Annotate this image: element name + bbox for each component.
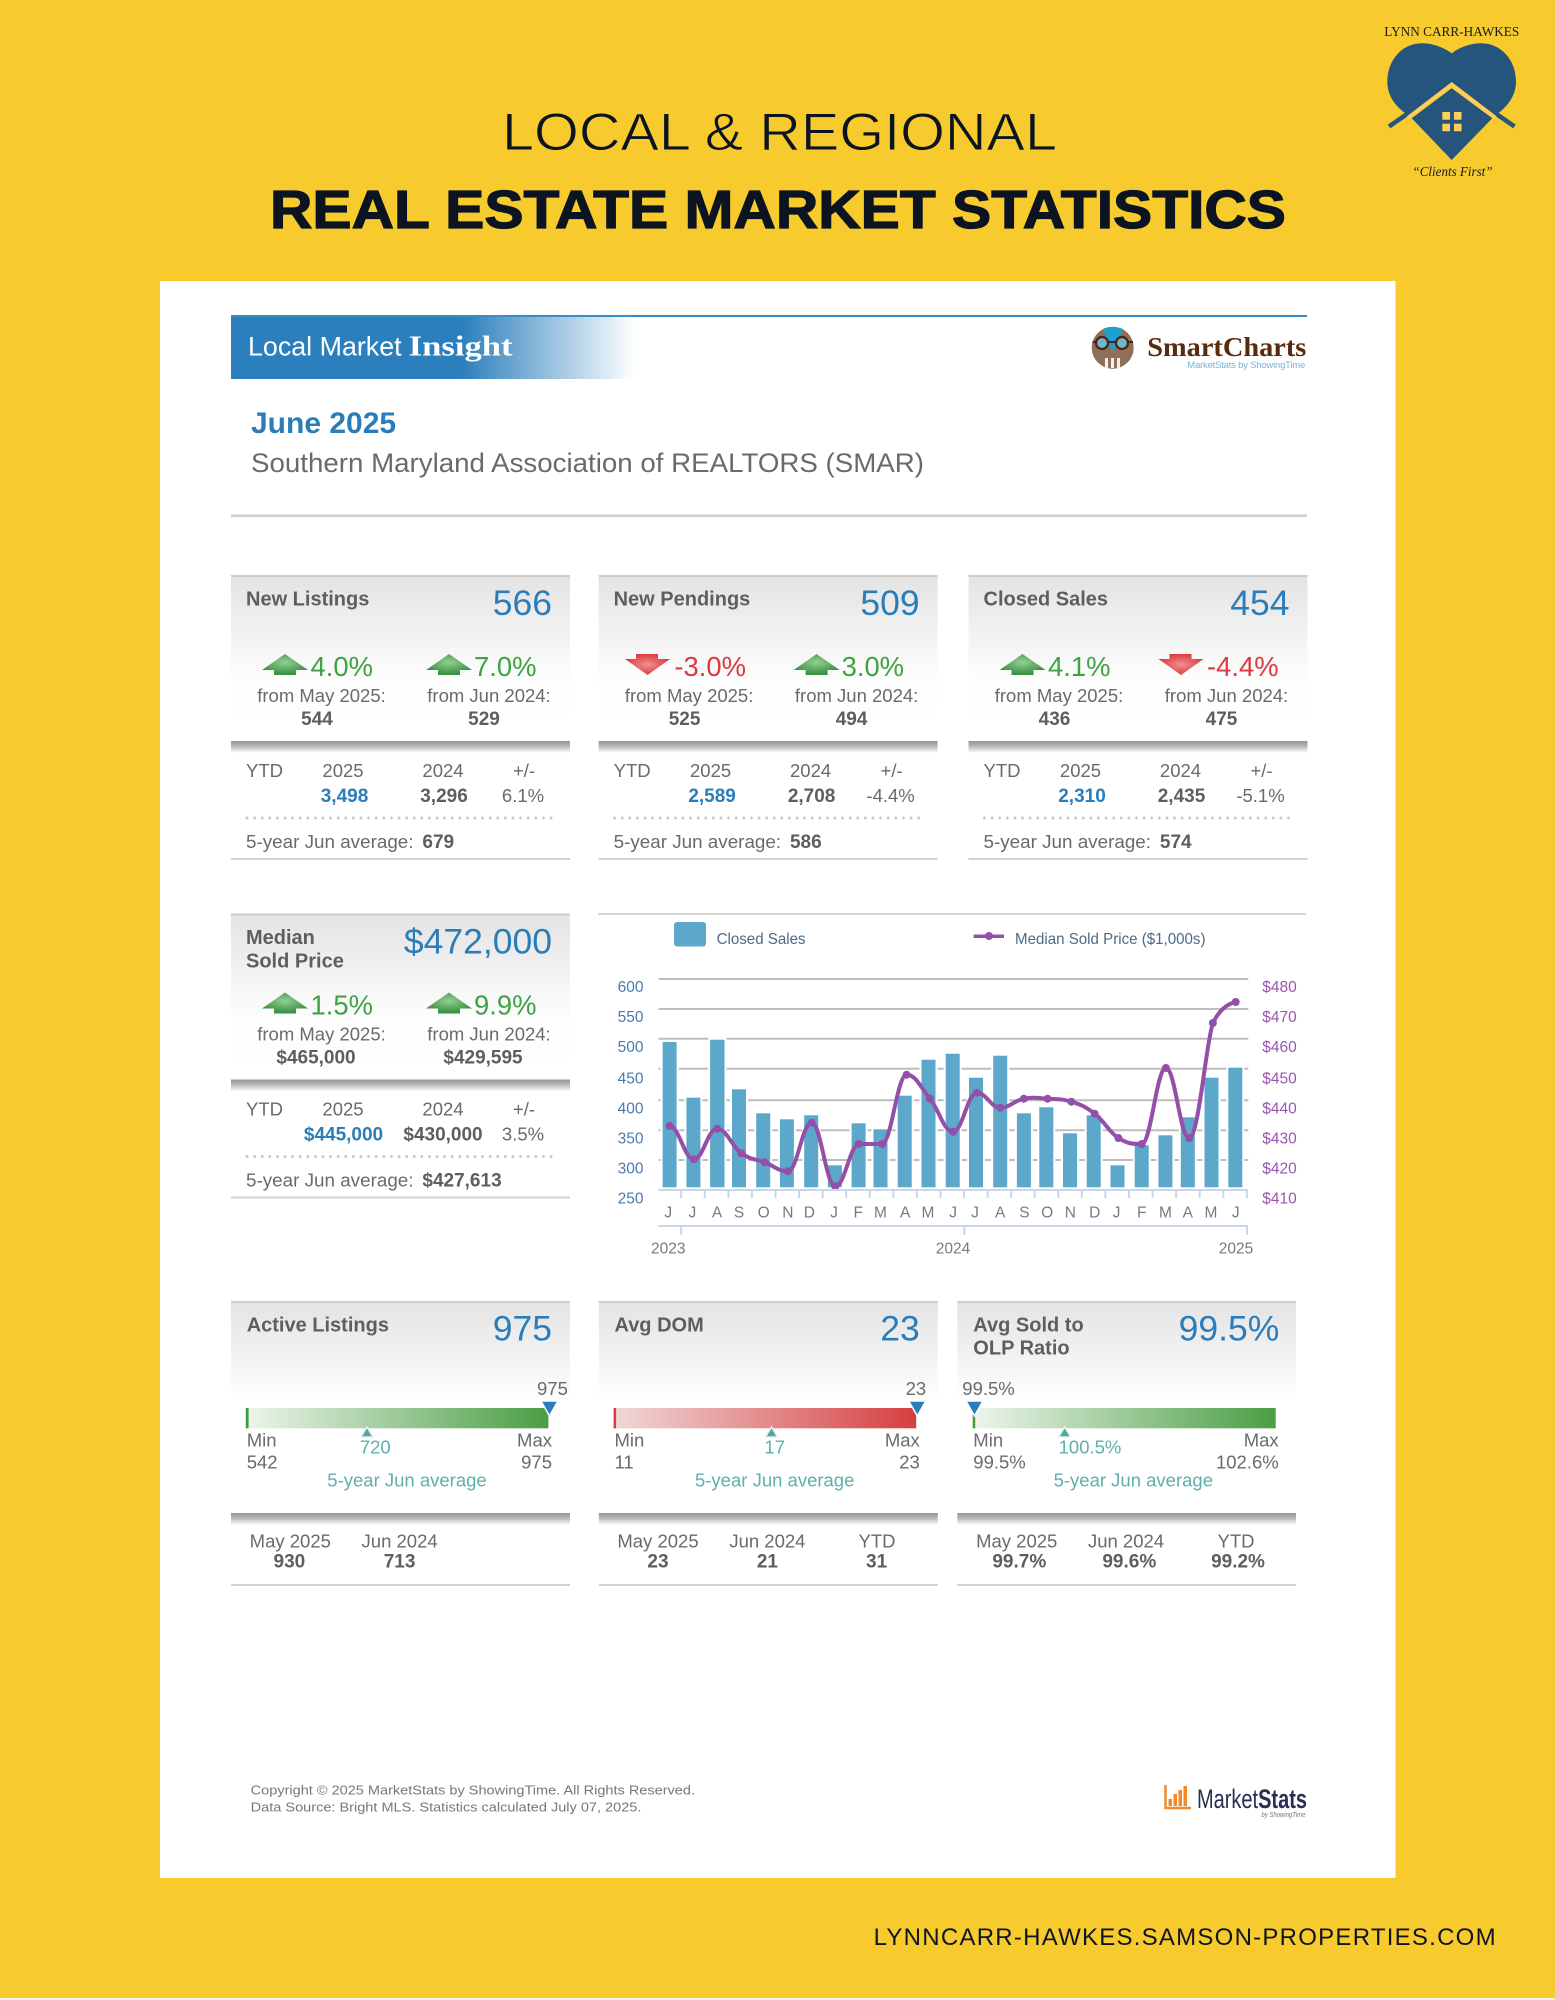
panel: Avg Sold to OLP Ratio: 102.6% bbox=[1216, 1451, 1279, 1472]
panel: New Listings: 3,296 bbox=[420, 786, 468, 807]
panel: Closed Sales: 574 bbox=[1160, 832, 1192, 853]
panel: New Pendings: 494 bbox=[836, 709, 868, 730]
x axis: months and years: J bbox=[1232, 1204, 1240, 1221]
panel: Avg Sold to OLP Ratio: 5-year Jun average bbox=[1054, 1470, 1213, 1491]
panel: New Listings: from May 2025: bbox=[257, 685, 386, 706]
right axis labels: median price: $410 bbox=[1262, 1191, 1297, 1208]
panel: Avg DOM: 5-year Jun average bbox=[695, 1470, 854, 1491]
gauge bar bbox=[966, 1401, 1276, 1437]
x axis: months and years: A bbox=[712, 1204, 723, 1221]
copyright footnote: Copyright © 2025 MarketStats by ShowingTime. All Rights Reserved. bbox=[251, 1782, 695, 1797]
panel: Active Listings: Active Listings bbox=[247, 1315, 389, 1337]
panel: Closed Sales: 2024 bbox=[1160, 760, 1201, 781]
panel: New Pendings: YTD bbox=[614, 760, 651, 781]
left axis labels: closed sales: 350 bbox=[618, 1131, 644, 1148]
panel: Avg DOM: 11 bbox=[614, 1451, 634, 1472]
panel: New Listings: 5-year Jun average: bbox=[246, 831, 414, 852]
panel: Median Sold Price: 1.5% bbox=[310, 990, 373, 1020]
panel: New Pendings: from May 2025: bbox=[625, 685, 753, 706]
panel: New Pendings: 5-year Jun average: bbox=[614, 831, 781, 852]
panel: New Listings: 2025 bbox=[322, 760, 364, 781]
right axis labels: median price: $430 bbox=[1262, 1131, 1297, 1148]
logo: MarketStats bbox=[1166, 1784, 1307, 1819]
title: LOCAL & REGIONAL bbox=[502, 103, 1057, 162]
panel: Closed Sales: +/- bbox=[1250, 760, 1273, 781]
report date and association heading: June 2025 bbox=[251, 407, 396, 440]
x axis: months and years: S bbox=[1019, 1204, 1030, 1221]
panel: Avg Sold to OLP Ratio: 99.7% bbox=[992, 1552, 1046, 1573]
panel: New Pendings: +/- bbox=[881, 760, 903, 781]
panel: New Pendings: New Pendings bbox=[614, 588, 750, 610]
report date and association heading: Southern Maryland Association of REALTORS (SMAR) bbox=[251, 448, 924, 478]
panel: Median Sold Price: 2025 bbox=[322, 1098, 364, 1120]
title: REAL ESTATE MARKET STATISTICS bbox=[270, 180, 1286, 240]
panel: Active Listings: 720 bbox=[360, 1436, 391, 1457]
x axis: months and years: 2024 bbox=[936, 1240, 971, 1257]
line: median sold price bbox=[666, 998, 1240, 1190]
panel: Avg Sold to OLP Ratio: Jun 2024 bbox=[1088, 1531, 1164, 1552]
right axis labels: median price: $440 bbox=[1262, 1101, 1297, 1118]
panel: New Listings: New Listings bbox=[246, 588, 369, 610]
panel: New Listings: 3,498 bbox=[321, 786, 368, 807]
panel: Active Listings: 975 bbox=[521, 1451, 552, 1472]
logo: MarketStats: MarketStats bbox=[1197, 1784, 1307, 1814]
logo: Lynn Carr-Hawkes heart and house bbox=[1384, 24, 1519, 180]
panel: Avg Sold to OLP Ratio: Avg Sold to bbox=[973, 1315, 1084, 1337]
panel: Median Sold Price: from May 2025: bbox=[257, 1024, 386, 1044]
panel: Closed Sales bbox=[968, 575, 1308, 860]
x axis: months and years: M bbox=[1205, 1204, 1217, 1221]
panel: Avg DOM: 23 bbox=[880, 1309, 920, 1349]
panel: Active Listings: 542 bbox=[247, 1451, 278, 1472]
panel: Median Sold Price bbox=[231, 914, 570, 1198]
panel: white report sheet bbox=[160, 281, 1396, 1878]
panel: Avg Sold to OLP Ratio: OLP Ratio bbox=[973, 1337, 1070, 1359]
header band: Local Market Insight: Local Market bbox=[248, 332, 402, 362]
panel: New Listings: +/- bbox=[513, 760, 535, 781]
x axis: months and years: M bbox=[874, 1204, 887, 1221]
right axis labels: median price: $480 bbox=[1262, 979, 1297, 996]
panel: Avg DOM: Max bbox=[885, 1430, 921, 1451]
x axis: months and years: J bbox=[830, 1204, 838, 1221]
logo: SmartCharts owl: MarketStats by ShowingTime bbox=[1187, 360, 1305, 371]
panel: Median Sold Price: $429,595 bbox=[443, 1048, 523, 1068]
panel: Avg Sold to OLP Ratio: 99.6% bbox=[1102, 1552, 1156, 1573]
header band: Local Market Insight bbox=[231, 315, 1307, 379]
panel: New Listings: 7.0% bbox=[474, 651, 536, 682]
x axis: months and years: A bbox=[1183, 1204, 1194, 1221]
panel: New Listings: 679 bbox=[422, 832, 454, 853]
chart legend: Closed Sales bbox=[717, 931, 806, 948]
panel: Active Listings: 930 bbox=[274, 1552, 305, 1573]
panel: Active Listings bbox=[231, 1301, 570, 1586]
panel: Avg Sold to OLP Ratio: 100.5% bbox=[1059, 1436, 1121, 1457]
panel: New Pendings: 525 bbox=[669, 709, 701, 730]
panel: Median Sold Price: +/- bbox=[513, 1098, 535, 1120]
left axis labels: closed sales: 600 bbox=[618, 979, 644, 996]
panel: Active Listings: May 2025 bbox=[250, 1531, 331, 1552]
chart legend bbox=[674, 922, 1206, 948]
panel: Active Listings: Max bbox=[517, 1430, 553, 1451]
x axis: months and years: F bbox=[1137, 1204, 1146, 1221]
panel: Closed Sales: YTD bbox=[984, 760, 1020, 781]
panel: Avg DOM: Min bbox=[614, 1430, 644, 1451]
x axis: months and years: S bbox=[734, 1204, 744, 1221]
right axis labels: median price: $470 bbox=[1262, 1009, 1297, 1026]
panel: New Pendings: 509 bbox=[860, 583, 920, 623]
right axis labels: median price: $450 bbox=[1262, 1071, 1297, 1088]
panel: New Pendings: 2025 bbox=[690, 760, 731, 781]
panel: Median Sold Price: $465,000 bbox=[276, 1048, 356, 1068]
panel: Median Sold Price: YTD bbox=[246, 1098, 283, 1120]
left axis labels: closed sales: 550 bbox=[618, 1009, 644, 1026]
left axis labels: closed sales: 450 bbox=[618, 1071, 644, 1088]
chart legend: Median Sold Price ($1,000s) bbox=[1015, 931, 1206, 948]
panel: Avg DOM bbox=[599, 1301, 938, 1586]
logo: SmartCharts owl bbox=[1092, 327, 1306, 371]
copyright footnote bbox=[251, 1782, 695, 1815]
panel: Avg DOM: 17 bbox=[764, 1436, 785, 1457]
panel: Avg DOM: 23 bbox=[899, 1451, 920, 1472]
panel: New Listings: 566 bbox=[493, 583, 552, 623]
panel: Avg Sold to OLP Ratio: YTD bbox=[1218, 1531, 1254, 1552]
x axis: months and years: D bbox=[1089, 1204, 1100, 1221]
panel: Median Sold Price: $445,000 bbox=[304, 1124, 383, 1146]
panel: New Pendings: from Jun 2024: bbox=[795, 685, 918, 706]
panel: New Pendings: -4.4% bbox=[866, 785, 915, 806]
panel: Median Sold Price: $472,000 bbox=[404, 922, 552, 962]
panel: Closed Sales: -5.1% bbox=[1236, 785, 1285, 806]
header band: Local Market Insight: Insight bbox=[409, 331, 513, 363]
panel: Median Sold Price: from Jun 2024: bbox=[427, 1024, 551, 1044]
panel: Closed Sales: 4.1% bbox=[1048, 651, 1110, 682]
chart: Closed Sales and Median Sold Price bbox=[598, 913, 1306, 1257]
panel: Avg DOM: 21 bbox=[757, 1552, 778, 1573]
panel: Median Sold Price: Median bbox=[246, 927, 315, 949]
panel: Avg Sold to OLP Ratio: Min bbox=[973, 1430, 1003, 1451]
x axis: months and years: M bbox=[922, 1204, 934, 1221]
x axis: months and years: 2023 bbox=[651, 1240, 685, 1257]
panel: Avg Sold to OLP Ratio: May 2025 bbox=[976, 1531, 1057, 1552]
left axis labels: closed sales bbox=[618, 979, 644, 1208]
panel: Avg DOM: 31 bbox=[866, 1552, 888, 1573]
panel: Avg DOM: 23 bbox=[647, 1552, 669, 1573]
x axis: months and years: F bbox=[853, 1204, 863, 1221]
panel: Active Listings: 975 bbox=[537, 1378, 568, 1399]
panel: Avg DOM: YTD bbox=[858, 1531, 896, 1552]
logo: Lynn Carr-Hawkes heart and house: LYNN CARR-HAWKES bbox=[1384, 24, 1519, 39]
x axis: months and years: M bbox=[1159, 1204, 1172, 1221]
x axis: months and years: O bbox=[758, 1204, 770, 1221]
panel: Closed Sales: 5-year Jun average: bbox=[984, 831, 1151, 852]
panel: New Pendings: 586 bbox=[790, 832, 822, 853]
bars: closed sales bbox=[663, 1040, 1242, 1187]
panel: Avg Sold to OLP Ratio bbox=[957, 1301, 1296, 1586]
panel: Avg Sold to OLP Ratio: Max bbox=[1244, 1430, 1279, 1451]
x axis: months and years: D bbox=[804, 1204, 815, 1221]
panel: Active Listings: 5-year Jun average bbox=[327, 1470, 487, 1491]
x axis: months and years: N bbox=[1065, 1204, 1076, 1221]
panel: Closed Sales: -4.4% bbox=[1207, 651, 1279, 682]
panel: Median Sold Price: $430,000 bbox=[403, 1124, 483, 1146]
x axis: months and years: N bbox=[782, 1204, 794, 1221]
panel: Avg Sold to OLP Ratio: 99.2% bbox=[1211, 1552, 1265, 1573]
panel: Active Listings: 713 bbox=[384, 1552, 415, 1573]
left axis labels: closed sales: 300 bbox=[618, 1161, 644, 1178]
panel: Avg DOM: Avg DOM bbox=[614, 1315, 704, 1337]
panel: Avg Sold to OLP Ratio: 99.5% bbox=[962, 1378, 1015, 1399]
logo: Lynn Carr-Hawkes heart and house: “Clients First” bbox=[1412, 165, 1493, 180]
panel: New Listings: 4.0% bbox=[310, 651, 373, 682]
panel: Closed Sales: 2025 bbox=[1060, 760, 1101, 781]
panel: New Pendings: -3.0% bbox=[674, 651, 746, 682]
x axis: months and years: J bbox=[971, 1204, 979, 1221]
left axis labels: closed sales: 500 bbox=[618, 1039, 644, 1056]
x axis: months and years: J bbox=[949, 1204, 957, 1221]
panel: New Pendings: 3.0% bbox=[842, 651, 904, 682]
panel: Median Sold Price: 5-year Jun average: bbox=[246, 1170, 414, 1190]
right axis labels: median price bbox=[1262, 979, 1297, 1208]
logo: MarketStats: by ShowingTime bbox=[1261, 1812, 1305, 1819]
panel: Avg Sold to OLP Ratio: 99.5% bbox=[973, 1451, 1026, 1472]
report date and association heading bbox=[251, 407, 924, 478]
panel: Active Listings: 975 bbox=[493, 1309, 552, 1349]
panel: New Pendings: 2,708 bbox=[788, 786, 835, 807]
website url: LYNNCARR-HAWKES.SAMSON-PROPERTIES.COM bbox=[874, 1924, 1496, 1951]
panel: Avg Sold to OLP Ratio: 99.5% bbox=[1179, 1309, 1279, 1349]
panel: Avg DOM: May 2025 bbox=[617, 1531, 699, 1552]
panel: Median Sold Price: 2024 bbox=[422, 1098, 464, 1120]
panel: Median Sold Price: 9.9% bbox=[474, 990, 536, 1020]
copyright footnote: Data Source: Bright MLS. Statistics calculated July 07, 2025. bbox=[251, 1800, 641, 1815]
panel: Closed Sales: 436 bbox=[1039, 709, 1070, 730]
panel: Closed Sales: from May 2025: bbox=[995, 685, 1123, 706]
panel: Closed Sales: 2,310 bbox=[1058, 786, 1106, 807]
x axis: months and years: 2025 bbox=[1219, 1240, 1253, 1257]
right axis labels: median price: $460 bbox=[1262, 1039, 1297, 1056]
chart grid lines bbox=[658, 979, 1248, 1160]
panel: Closed Sales: 2,435 bbox=[1158, 786, 1206, 807]
panel: New Listings: 544 bbox=[301, 709, 333, 730]
panel: Closed Sales: 454 bbox=[1230, 583, 1290, 623]
x axis: months and years bbox=[651, 1190, 1253, 1257]
x axis: months and years: J bbox=[689, 1204, 696, 1221]
x axis: months and years: A bbox=[900, 1204, 911, 1221]
panel: New Pendings: 2,589 bbox=[688, 786, 736, 807]
right axis labels: median price: $420 bbox=[1262, 1161, 1297, 1178]
x axis: months and years: J bbox=[1113, 1204, 1120, 1221]
panel: Active Listings: Jun 2024 bbox=[362, 1531, 438, 1552]
panel: Avg DOM: Jun 2024 bbox=[729, 1531, 805, 1552]
panel: Median Sold Price: $427,613 bbox=[422, 1170, 502, 1192]
panel: Closed Sales: from Jun 2024: bbox=[1165, 685, 1288, 706]
left axis labels: closed sales: 400 bbox=[618, 1101, 644, 1118]
x axis: months and years: O bbox=[1041, 1204, 1053, 1221]
panel: New Listings: 2024 bbox=[422, 760, 464, 781]
gauge bar bbox=[246, 1401, 558, 1437]
panel: New Listings: 6.1% bbox=[502, 785, 544, 806]
title bbox=[270, 103, 1286, 240]
panel: Closed Sales: Closed Sales bbox=[984, 588, 1108, 610]
panel: New Listings: 529 bbox=[468, 709, 500, 730]
panel: New Pendings bbox=[599, 575, 938, 860]
panel: Median Sold Price: Sold Price bbox=[246, 950, 344, 972]
x axis: months and years: A bbox=[995, 1204, 1006, 1221]
panel: New Listings: from Jun 2024: bbox=[427, 685, 551, 706]
panel: New Listings bbox=[231, 575, 570, 860]
panel: New Pendings: 2024 bbox=[790, 760, 831, 781]
panel: Median Sold Price: 3.5% bbox=[502, 1124, 544, 1144]
x axis: months and years: J bbox=[664, 1204, 672, 1221]
logo: SmartCharts owl: SmartCharts bbox=[1147, 332, 1306, 362]
panel: Active Listings: Min bbox=[247, 1430, 277, 1451]
gauge bar bbox=[614, 1401, 926, 1437]
left axis labels: closed sales: 250 bbox=[618, 1191, 644, 1208]
panel: Avg DOM: 23 bbox=[906, 1378, 926, 1399]
panel: Closed Sales: 475 bbox=[1206, 709, 1238, 730]
panel: New Listings: YTD bbox=[246, 760, 283, 781]
